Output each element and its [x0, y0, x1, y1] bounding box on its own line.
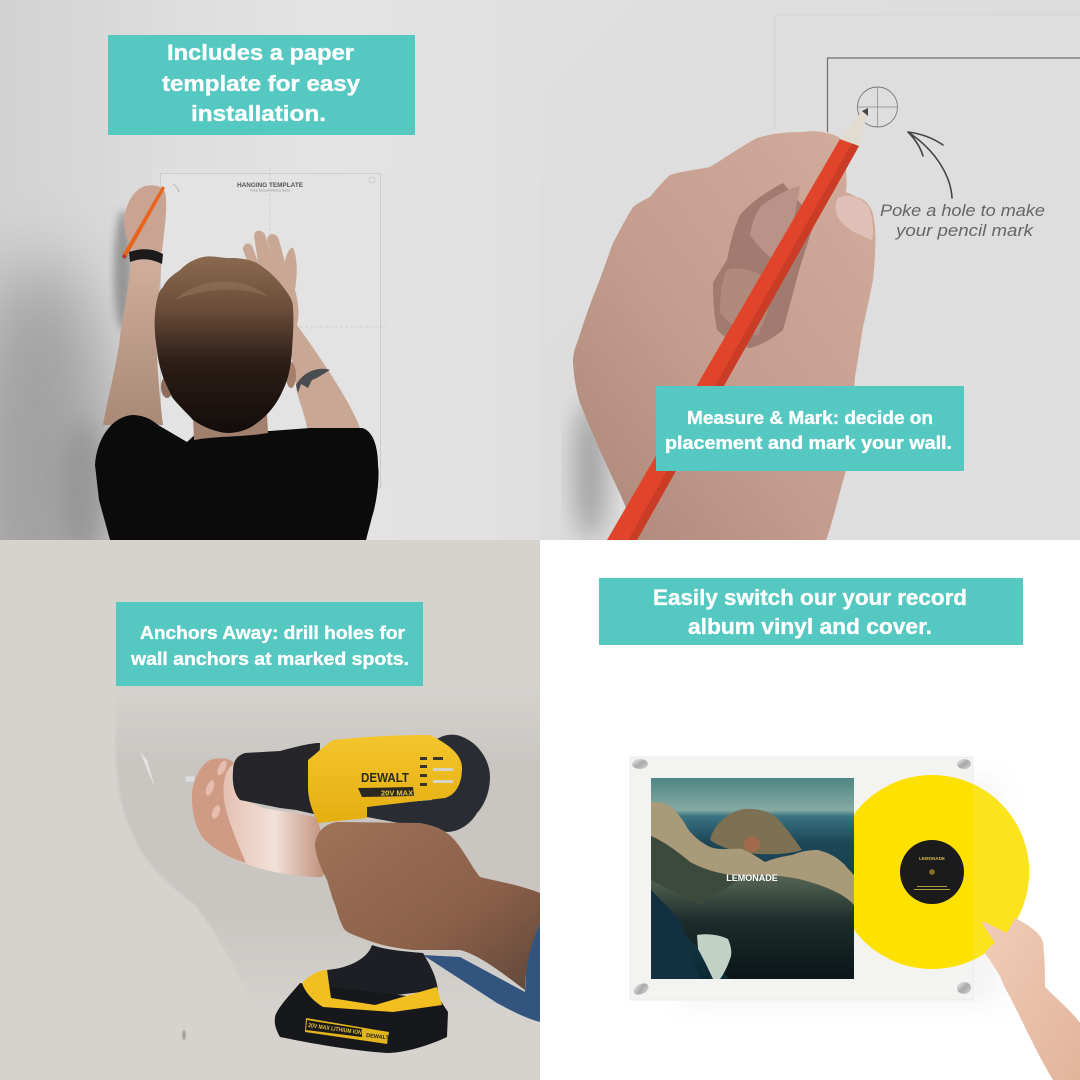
hanging template sheet: POKE THOUGH PENCIL MARK: [250, 188, 290, 192]
callout: anchors away: Anchors Away: drill holes for: [140, 622, 405, 643]
yellow drill body: [308, 735, 462, 823]
bottom-left blue shadow: [651, 890, 700, 979]
small mark on wall: [182, 1030, 186, 1040]
wall shadow: [974, 954, 992, 997]
sleeve: [423, 923, 540, 1022]
feather: [697, 934, 731, 979]
callout: anchors away: [116, 602, 423, 686]
hanging template sheet: HANGING TEMPLATE: [237, 183, 303, 189]
drill rear housing: [367, 735, 490, 832]
callout: anchors away: wall anchors at marked spots.: [130, 648, 409, 669]
hanging template sheet: [153, 167, 387, 489]
template paper with crosshair: [774, 15, 1080, 132]
cream fur: [651, 802, 854, 905]
hand holding pencil: [573, 108, 875, 540]
callout: paper template: Includes a paper: [167, 40, 354, 65]
neck and ears: [161, 362, 296, 440]
callout: measure and mark: Measure & Mark: decide on: [687, 407, 933, 428]
battery label: 20V MAX LITHIUM ION: [308, 1023, 362, 1036]
callout: switch record: album vinyl and cover.: [688, 614, 932, 639]
drill handle: [327, 945, 438, 995]
callout: paper template: [108, 35, 415, 135]
battery label: DEWALT: [366, 1033, 390, 1041]
drill chuck: [233, 743, 320, 815]
standoff screws: [632, 759, 971, 997]
panel: measure and mark close-up: [540, 0, 1080, 540]
panel: paper template on wall: [0, 0, 540, 540]
person's right hand and forearm: [243, 231, 360, 428]
highlight sliver: [140, 752, 155, 788]
DeWalt badge: [358, 771, 414, 798]
yellow vinyl record: [835, 775, 1029, 969]
callout: switch record: [599, 578, 1023, 645]
callout: measure and mark: placement and mark your wall.: [665, 432, 952, 453]
pencil mark instruction: your pencil mark: [895, 222, 1034, 240]
acrylic frame: [630, 757, 973, 1000]
pencil mark instruction: [880, 202, 1045, 240]
record label: [900, 840, 964, 904]
album cover: LEMONADE: [726, 873, 778, 883]
DeWalt badge: DEWALT: [361, 771, 409, 785]
wall shadow arc: [116, 734, 540, 952]
battery label: [305, 1018, 390, 1044]
drill and hands: [192, 735, 540, 1053]
record label: LEMONADE: [919, 856, 945, 861]
supporting hand: [192, 758, 330, 877]
head: [710, 809, 802, 854]
black t-shirt: [95, 415, 379, 540]
callout: switch record: Easily switch our your record: [653, 585, 967, 610]
wall anchor: [185, 776, 195, 782]
pencil mark instruction: Poke a hole to make: [880, 202, 1045, 220]
callout: measure and mark: [656, 386, 964, 471]
battery black base: [275, 983, 448, 1053]
dark fur: [651, 835, 854, 979]
person's left arm and hand with pencil: [103, 185, 166, 425]
panel: swapping the record: [599, 578, 1080, 1080]
album cover: [651, 778, 854, 979]
panel: drilling wall anchors: [0, 540, 560, 1080]
hair: [155, 256, 293, 433]
hand holding record: [982, 918, 1080, 1080]
gripping arm: [315, 822, 540, 990]
DeWalt badge: 20V MAX: [381, 788, 413, 798]
vents: [420, 757, 453, 786]
hand-drawn arrow: [908, 132, 952, 198]
callout: paper template: installation.: [191, 101, 326, 126]
callout: paper template: template for easy: [162, 71, 361, 96]
battery yellow cover: [302, 970, 442, 1012]
